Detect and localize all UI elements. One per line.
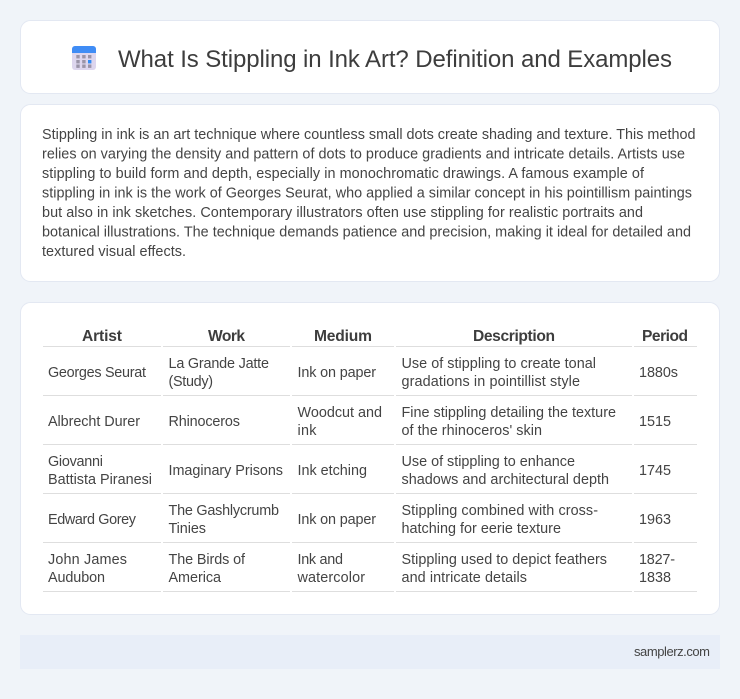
table row: Georges Seurat: La Grande Jatte <box>168 356 269 372</box>
table row: John James Audubon: watercolor <box>296 570 365 586</box>
table row: Albrecht Durer: Fine stippling detailing the texture <box>402 405 616 421</box>
table row: Albrecht Durer: Albrecht Durer <box>48 414 140 430</box>
table row: Albrecht Durer: ink <box>298 423 317 439</box>
table header row: Work <box>208 328 245 345</box>
table row: John James Audubon: 1827- <box>639 552 675 568</box>
table row: Edward Gorey: Tinies <box>168 521 206 537</box>
table row: Edward Gorey: Stippling combined with cross- <box>402 503 598 519</box>
table row: Giovanni Battista Piranesi <box>48 454 671 488</box>
table row: Giovanni Battista Piranesi: Imaginary Prisons <box>168 463 283 479</box>
table row: John James Audubon: Ink and <box>298 552 343 568</box>
table row: John James Audubon: The Birds of <box>168 552 246 568</box>
table row: John James Audubon: 1838 <box>639 570 671 586</box>
table header row: Description <box>473 328 555 345</box>
table row: Giovanni Battista Piranesi: 1745 <box>639 463 671 479</box>
title: What Is Stippling in Ink Art? Definition and Examples <box>118 46 672 73</box>
table row: Georges Seurat: Use of stippling to create tonal <box>402 356 596 372</box>
table row: John James Audubon: Audubon <box>48 570 105 586</box>
table header row: Period <box>642 328 688 345</box>
text block: introduction paragraph: textured visual effects. <box>42 244 186 260</box>
table row: John James Audubon: America <box>168 570 221 586</box>
table row: Georges Seurat: Ink on paper <box>298 365 376 381</box>
table row: Giovanni Battista Piranesi: Battista Piranesi <box>48 472 152 488</box>
text block: introduction paragraph <box>42 127 696 260</box>
table row: John James Audubon <box>48 552 675 586</box>
text block: introduction paragraph: stippling to build form and depth, especially in monochromatic drawings. A famous example of <box>42 166 645 182</box>
table row: Giovanni Battista Piranesi: Ink etching <box>298 463 367 479</box>
panel: introduction <box>20 104 720 282</box>
footer source label: samplerz.com <box>634 644 710 659</box>
text block: introduction paragraph: Stippling in ink is an art technique where countless small dots create shading and texture. This method <box>42 127 696 143</box>
text block: introduction paragraph: stippling in ink is the work of Georges Seurat, who applied a similar concept in his pointillism paintings <box>42 186 692 202</box>
table row: Albrecht Durer: Woodcut and <box>298 405 382 421</box>
table row: Albrecht Durer: of the rhinoceros' skin <box>402 423 542 439</box>
icon: calendar <box>72 46 96 70</box>
table row: Giovanni Battista Piranesi: shadows and architectural depth <box>402 472 609 488</box>
table header row: Artist <box>82 328 122 345</box>
table row: Georges Seurat: gradations in pointillist style <box>402 374 580 390</box>
table row: John James Audubon: Stippling used to depict feathers <box>402 552 607 568</box>
text block: introduction paragraph: relies on varying the density and pattern of dots to produce gradients and intricate details. Artists use <box>42 146 685 162</box>
text block: introduction paragraph: botanical illustrations. The technique demands patience and precision, making it ideal for detailed and <box>42 224 691 240</box>
footer <box>20 635 720 669</box>
table row: Albrecht Durer: 1515 <box>639 414 671 430</box>
table row: Edward Gorey: 1963 <box>639 512 671 528</box>
table row: Georges Seurat: Georges Seurat <box>48 365 146 381</box>
table row: John James Audubon: and intricate details <box>402 570 527 586</box>
table row: Albrecht Durer: Rhinoceros <box>168 414 240 430</box>
table row: Edward Gorey: Edward Gorey <box>48 512 137 528</box>
table row: Georges Seurat <box>48 356 678 390</box>
table header row: Medium <box>314 328 372 345</box>
table row: Georges Seurat: 1880s <box>639 365 678 381</box>
text block: introduction paragraph: but also in ink sketches. Contemporary illustrators often use stippling for realistic portraits and <box>42 205 643 221</box>
table row: Edward Gorey: Ink on paper <box>298 512 376 528</box>
table row: Edward Gorey: The Gashlycrumb <box>168 503 279 519</box>
table row: Giovanni Battista Piranesi: Use of stippling to enhance <box>402 454 575 470</box>
table row: Giovanni Battista Piranesi: Giovanni <box>48 454 103 470</box>
panel: table of artists <box>20 302 720 614</box>
table row: Edward Gorey <box>48 503 671 537</box>
table row: Georges Seurat: (Study) <box>168 374 213 390</box>
table header row <box>82 328 688 345</box>
table row: Edward Gorey: hatching for eerie texture <box>402 521 561 537</box>
table row: Albrecht Durer <box>48 405 671 439</box>
panel: header <box>20 20 720 94</box>
table row: John James Audubon: John James <box>48 552 127 568</box>
